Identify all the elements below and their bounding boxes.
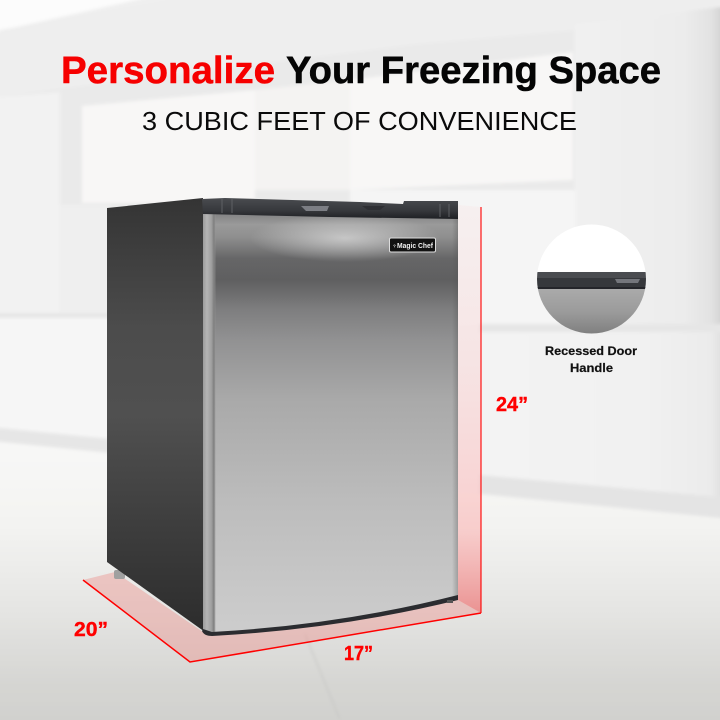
recessed handle top strip	[202, 198, 458, 219]
dimension: width 17: 17”	[344, 643, 373, 665]
Magic Chef badge: ♆Magic Chef	[392, 243, 434, 250]
callout: recessed door handle	[535, 222, 649, 375]
subtitle: 3 CUBIC FEET OF CONVENIENCE	[142, 106, 577, 136]
red floor footprint 17 x 20	[83, 572, 481, 662]
callout: recessed door handle: Handle	[570, 361, 613, 375]
freezer side panel	[107, 198, 205, 632]
freezer	[107, 198, 458, 637]
stainless door	[203, 212, 458, 637]
circular detail image	[535, 222, 649, 335]
rear foot	[447, 600, 453, 603]
red wall height 24	[458, 205, 481, 613]
Magic Chef badge	[390, 238, 436, 252]
freezer foot	[114, 570, 125, 579]
dimension: depth 20: 20”	[74, 619, 108, 641]
callout label: Recessed Door	[545, 344, 637, 358]
door bottom gasket	[202, 595, 458, 636]
title	[61, 50, 661, 92]
dimension: height 24: 24”	[496, 394, 528, 416]
title: Personalize	[61, 50, 275, 92]
title: Your Freezing Space	[286, 50, 661, 92]
